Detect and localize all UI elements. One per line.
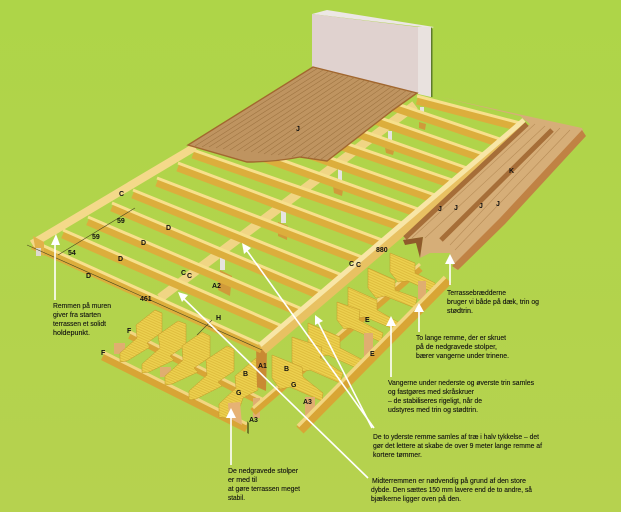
- part labels: 880: [376, 247, 388, 254]
- part labels: C: [356, 262, 361, 269]
- part labels: F: [101, 350, 106, 357]
- text: buried posts: at gøre terrassen meget: [228, 484, 301, 493]
- part labels: C: [187, 273, 192, 280]
- part labels: 59: [117, 218, 125, 225]
- text: wall beam: giver fra starten: [53, 310, 101, 319]
- joists: [33, 76, 520, 349]
- part labels: C: [119, 191, 124, 198]
- text: stringers: udstyres med trin og stødtrin.: [388, 405, 478, 414]
- text: stringers: [388, 378, 534, 414]
- text: outer beams: gør det lettere at skabe de over 9 meter lange remme af: [373, 441, 543, 450]
- part labels: J: [496, 201, 500, 208]
- part labels: K: [509, 168, 514, 175]
- text: buried posts: [228, 466, 301, 502]
- middle beam with posts: [160, 105, 426, 298]
- arrow: outer beam two: [315, 315, 372, 428]
- step front: [452, 130, 586, 270]
- arrow: outer beam one: [242, 243, 374, 428]
- left beam: [32, 147, 195, 256]
- part labels: A3: [303, 399, 312, 406]
- text: outer beams: De to yderste remme samles af træ i halv tykkelse – det: [373, 432, 540, 441]
- text: long beams: bærer vangerne under trinene.: [416, 351, 509, 360]
- text: buried posts: De nedgravede stolper: [228, 466, 298, 475]
- step notch: [403, 237, 423, 258]
- stringer panel: [337, 302, 383, 342]
- right beam: [260, 120, 526, 349]
- text: middle beam: bjælkerne ligger oven på den.: [371, 494, 461, 503]
- part labels: D: [141, 240, 146, 247]
- deck planks: [195, 68, 412, 160]
- part labels: D: [86, 273, 91, 280]
- arrow: long beams: [414, 303, 424, 332]
- stringer panels right: [390, 253, 435, 293]
- part labels: F: [127, 328, 132, 335]
- arrow: deck boards: [445, 254, 455, 285]
- arrow: middle beam: [178, 292, 368, 478]
- part labels: C: [349, 261, 354, 268]
- arrow: buried posts: [226, 408, 236, 465]
- text: long beams: [416, 333, 509, 360]
- text: stringers: og fastgøres med skråskruer: [388, 387, 474, 396]
- part labels: [68, 126, 514, 424]
- part labels: E: [370, 351, 375, 358]
- text: outer beams: [373, 432, 543, 459]
- inner rail left: [130, 332, 262, 402]
- text: long beams: To lange remme, der er skruet: [416, 333, 507, 342]
- stringer panel: [272, 355, 323, 401]
- part labels: D: [118, 256, 123, 263]
- part labels: J: [438, 206, 442, 213]
- front rail right: [298, 277, 448, 430]
- stringer panel: [368, 268, 417, 308]
- riser 2: [441, 130, 552, 240]
- inner rail right: [253, 264, 420, 412]
- part labels: G: [236, 390, 242, 397]
- steps K: [403, 97, 586, 270]
- stringer panel: [348, 287, 398, 330]
- left stairs: [103, 310, 262, 434]
- text: deck boards: Terrassebrædderne: [447, 288, 506, 297]
- text: deck boards: bruger vi både på dæk, trin og: [447, 297, 539, 306]
- posts left: [114, 343, 260, 418]
- deck J: [188, 67, 417, 162]
- text: middle beam: [371, 476, 533, 503]
- stringer panels left: [120, 310, 258, 418]
- text: stringers: – de stabiliseres rigeligt, når de: [388, 396, 482, 405]
- part labels: E: [365, 317, 370, 324]
- part labels: A1: [258, 363, 267, 370]
- dimension lines: [27, 208, 262, 350]
- wall: [312, 10, 434, 97]
- part labels: A2: [212, 283, 221, 290]
- part labels: B: [243, 371, 248, 378]
- text: wall beam: holdepunkt.: [53, 328, 90, 337]
- text: middle beam: dybde. Den sættes 150 mm lavere end de to andre, så: [371, 485, 533, 494]
- text: middle beam: Midterremmen er nødvendig på grund af den store: [372, 476, 526, 485]
- part labels: 54: [68, 250, 76, 257]
- stringer panel: [292, 337, 343, 383]
- part labels: J: [479, 203, 483, 210]
- text: wall beam: [53, 301, 111, 337]
- text: outer beams: kortere tømmer.: [373, 450, 422, 459]
- text: long beams: på de nedgravede stolper,: [416, 342, 497, 351]
- text: stringers: Vangerne under nederste og øverste trin samles: [388, 378, 534, 387]
- part labels: 461: [140, 296, 152, 303]
- text: buried posts: er med til: [228, 475, 257, 484]
- part labels: H: [216, 315, 221, 322]
- riser 1: [405, 124, 527, 238]
- text: wall beam: Remmen på muren: [53, 301, 111, 310]
- part labels: J: [296, 126, 300, 133]
- post A1: [256, 345, 267, 391]
- text: buried posts: stabil.: [228, 493, 245, 502]
- text: wall beam: terrassen et solidt: [53, 319, 107, 328]
- part labels: B: [284, 366, 289, 373]
- stringer panel: [308, 323, 363, 370]
- front rail left: [103, 352, 249, 434]
- part labels: A3: [249, 417, 258, 424]
- part labels: D: [166, 225, 171, 232]
- part labels: J: [454, 205, 458, 212]
- part labels: C: [181, 270, 186, 277]
- posts right: [305, 281, 426, 422]
- part labels: 59: [92, 234, 100, 241]
- arrow: stringers: [386, 316, 396, 377]
- text: deck boards: stødtrin.: [447, 306, 473, 315]
- post with arrow base: [228, 402, 242, 425]
- arrow: wall beam: [51, 234, 60, 300]
- part labels: G: [291, 382, 297, 389]
- plank lines: [412, 124, 570, 250]
- text: deck boards: [447, 288, 539, 315]
- right stairs: [253, 253, 448, 430]
